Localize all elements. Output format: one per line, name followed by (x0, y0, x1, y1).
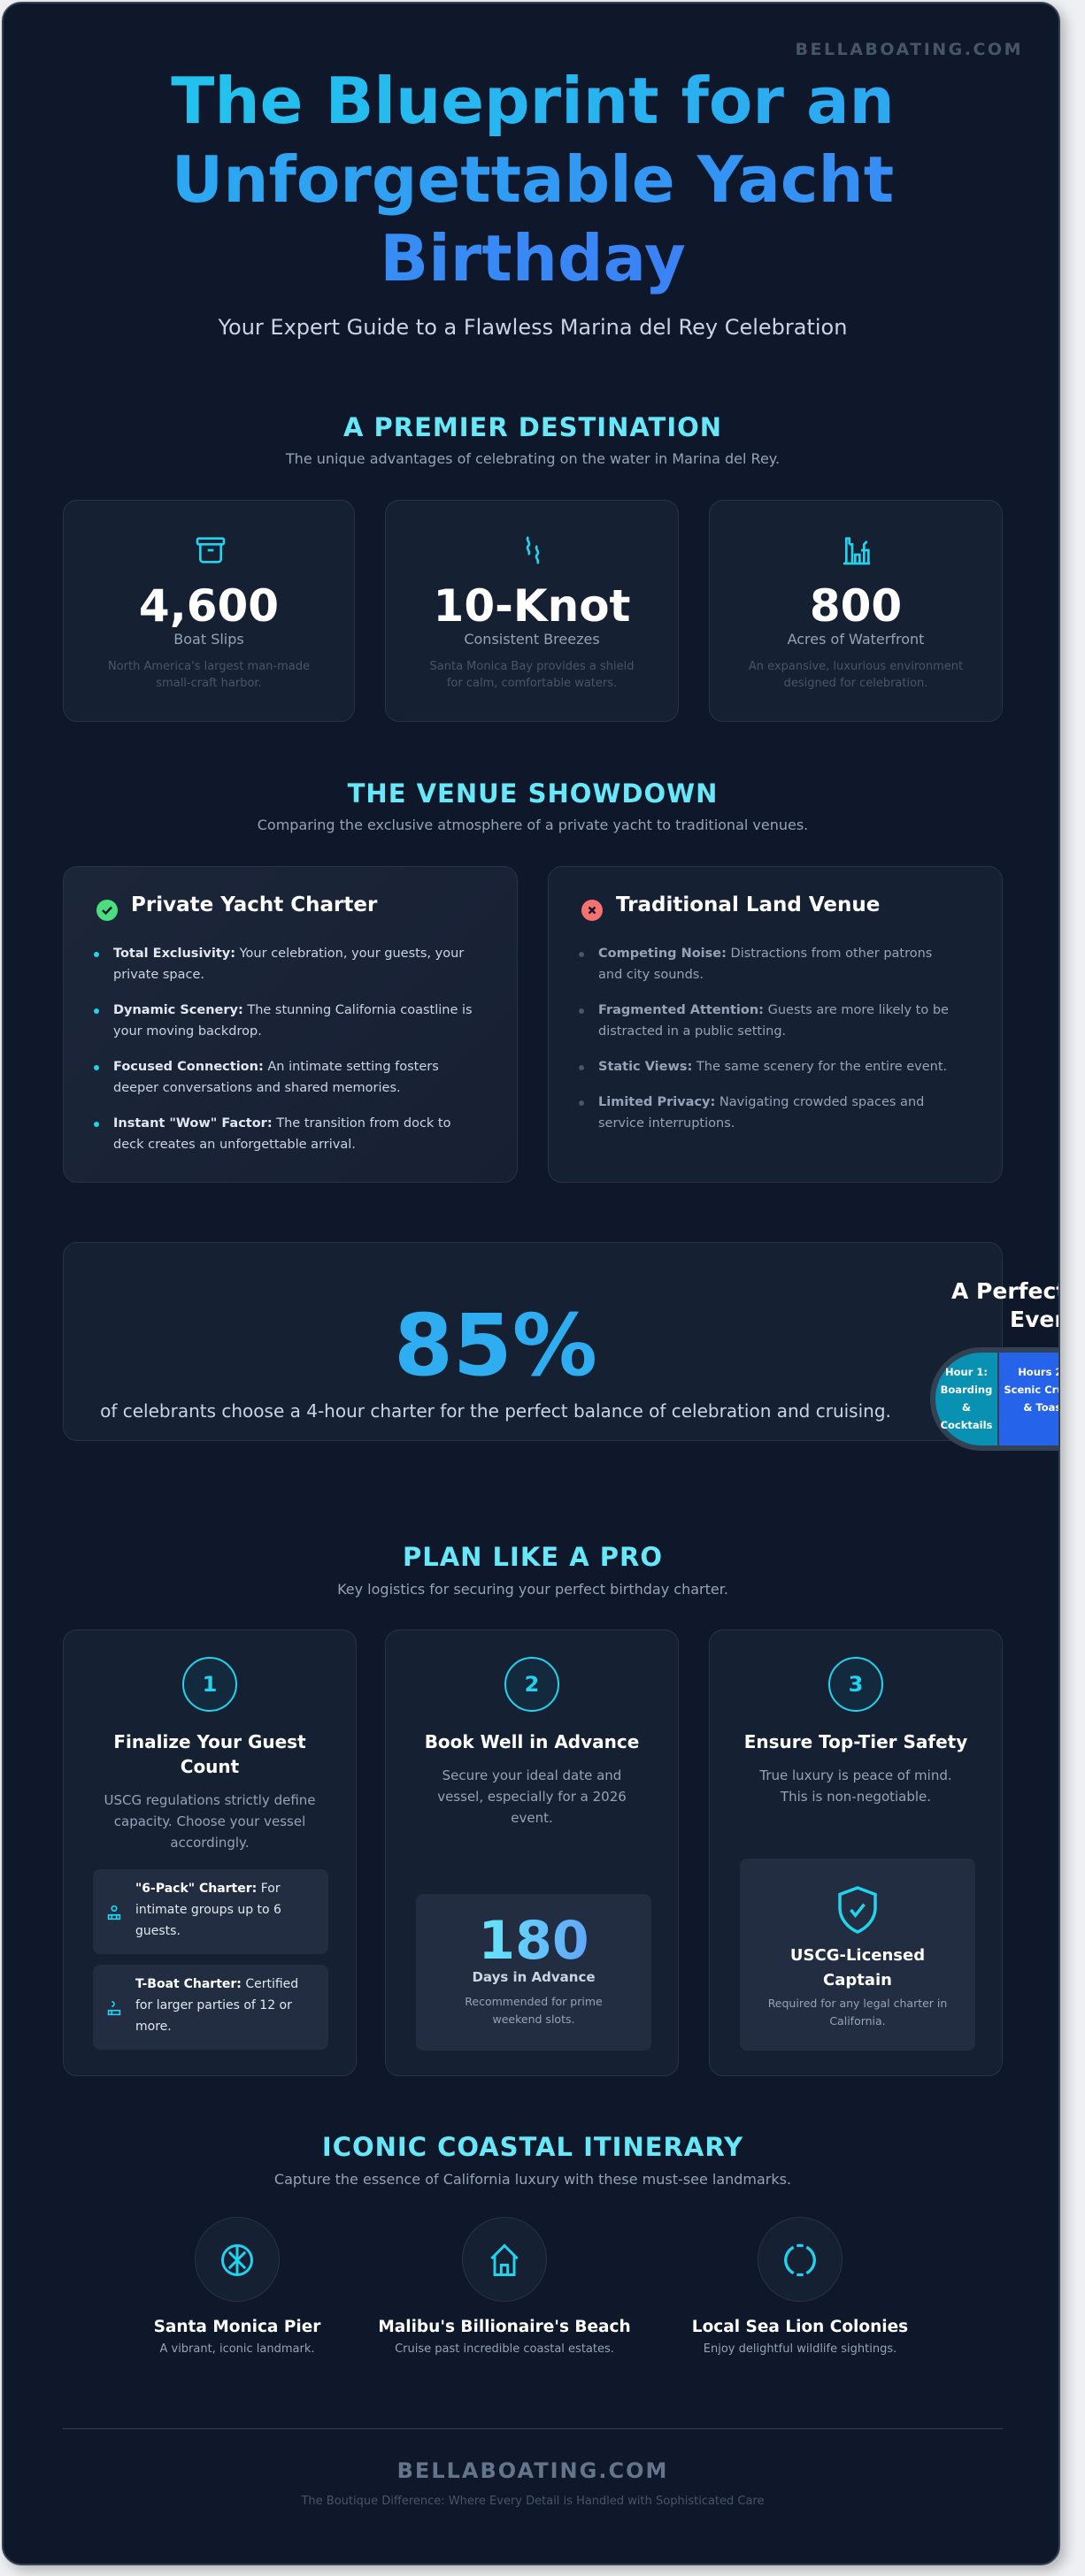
icon: shield (838, 1886, 877, 1934)
panel: private yacht: Dynamic Scenery: The stunning California coastline is your moving backdrop. (113, 1003, 473, 1039)
landmark: malibu: Malibu's Billionaire's Beach (378, 2318, 631, 2336)
brand top: BELLABOATING.COM (796, 40, 1023, 59)
caption: of celebrants choose a 4-hour charter for the perfect balance of celebration and cruising. (100, 1400, 891, 1422)
stat card: boat slips (63, 500, 355, 722)
segment hour 1: Hour 1: Boarding & Cocktails (941, 1366, 992, 1431)
timeline pill (clipped) (930, 1347, 1085, 1451)
title (171, 64, 895, 295)
subtitle: Your Expert Guide to a Flawless Marina del Rey Celebration (219, 315, 847, 340)
safety box (740, 1859, 975, 2051)
step 1 card: 1 (203, 1672, 217, 1697)
landmark: sea lions (692, 2217, 908, 2356)
title: The Blueprint for an (171, 64, 895, 138)
step 2 card (385, 1629, 679, 2076)
stat card: boat slips: North America's largest man-made small-craft harbor. (108, 660, 310, 690)
landmark: malibu (378, 2217, 631, 2356)
landmark: santa monica pier: Santa Monica Pier (154, 2318, 320, 2336)
heading: plan like a pro: PLAN LIKE A PRO (403, 1542, 663, 1572)
stat card: boat slips: 4,600 (139, 580, 279, 632)
panel: private yacht (63, 866, 518, 1183)
panel: private yacht: Total Exclusivity: Your celebration, your guests, your private space. (113, 947, 464, 982)
heading: premier destination: A PREMIER DESTINATION (343, 412, 722, 442)
panel: private yacht: Instant "Wow" Factor: The transition from dock to deck creates an unforgettable arrival. (113, 1116, 450, 1152)
panel: private yacht: Focused Connection: An intimate setting fosters deeper conversations and shared memories. (113, 1060, 439, 1095)
big number: 85% (394, 1296, 597, 1395)
step 1 card (63, 1629, 357, 2076)
stat box: 180 days: 180 (478, 1910, 589, 1972)
stat card: breezes: Santa Monica Bay provides a shield for calm, comfortable waters. (430, 660, 634, 690)
icon: box (196, 537, 225, 564)
safety box: Required for any legal charter in California. (768, 1997, 947, 2028)
timeline heading (clipped) (951, 1278, 1060, 1332)
stat box: 180 days: Days in Advance (472, 1969, 596, 1985)
icon: x (581, 900, 603, 921)
panel: land venue: Static Views: The same scenery for the entire event. (598, 1060, 947, 1074)
icon: waterfront (843, 537, 870, 564)
landmark: santa monica pier (154, 2217, 320, 2356)
stat card: breezes: Consistent Breezes (464, 631, 600, 648)
step 2 card: Secure your ideal date and vessel, especially for a 2026 event. (437, 1767, 627, 1826)
safety box: USCG-Licensed Captain (790, 1946, 925, 1990)
icon: check (96, 900, 118, 921)
stat card: acres: 800 (810, 580, 902, 632)
stat box: 180 days: Recommended for prime weekend slots. (465, 1995, 603, 2026)
stat card: acres: An expansive, luxurious environment designed for celebration. (749, 660, 963, 690)
step 2 card: Book Well in Advance (425, 1731, 639, 1752)
stat card: breezes (385, 500, 679, 722)
title: Birthday (380, 221, 686, 295)
sub box: 6-pack (93, 1869, 328, 1954)
step 1 card: Finalize Your Guest Count (113, 1731, 306, 1777)
sub box: 6-pack: "6-Pack" Charter: For intimate groups up to 6 guests. (135, 1882, 281, 1938)
landmark: sea lions: Enjoy delightful wildlife sightings. (704, 2342, 896, 2356)
panel: land venue (548, 866, 1003, 1183)
title: Unforgettable Yacht (172, 142, 894, 217)
landmark: sea lions: Local Sea Lion Colonies (692, 2318, 908, 2336)
step 3 card (709, 1629, 1003, 2076)
panel: land venue: Fragmented Attention: Guests are more likely to be distracted in a public setting. (598, 1003, 949, 1039)
sub box: t-boat (93, 1965, 328, 2050)
step 1 card: USCG regulations strictly define capacity. Choose your vessel accordingly. (104, 1792, 316, 1851)
heading: venue showdown: THE VENUE SHOWDOWN (348, 778, 718, 809)
landmark: malibu: Cruise past incredible coastal estates. (395, 2342, 614, 2356)
subheading: Key logistics for securing your perfect birthday charter. (337, 1581, 728, 1598)
stat card: breezes: 10-Knot (434, 580, 630, 632)
heading: itinerary: ICONIC COASTAL ITINERARY (322, 2132, 743, 2162)
sub box: t-boat: T-Boat Charter: Certified for larger parties of 12 or more. (135, 1977, 298, 2034)
footer brand: BELLABOATING.COM (397, 2458, 668, 2483)
subheading: Comparing the exclusive atmosphere of a private yacht to traditional venues. (258, 816, 808, 833)
stat box: 180 days (416, 1894, 651, 2051)
panel: land venue: Traditional Land Venue (616, 893, 880, 916)
panel: land venue: Limited Privacy: Navigating crowded spaces and service interruptions. (598, 1095, 924, 1131)
stat card: boat slips: Boat Slips (173, 631, 244, 648)
step 3 card: True luxury is peace of mind. This is non-negotiable. (759, 1767, 952, 1805)
landmark: santa monica pier: A vibrant, iconic landmark. (159, 2342, 315, 2356)
footer tagline: The Boutique Difference: Where Every Detail is Handled with Sophisticated Care (301, 2495, 765, 2508)
segment hours 2-3 (999, 1353, 1085, 1445)
stat card: acres (709, 500, 1003, 722)
icon: wind (526, 536, 540, 564)
step 3 card: Ensure Top-Tier Safety (744, 1731, 967, 1752)
step 3 card: 3 (849, 1672, 863, 1697)
subheading: Capture the essence of California luxury with these must-see landmarks. (274, 2171, 791, 2188)
panel: private yacht: Private Yacht Charter (131, 893, 377, 916)
segment hour 1 (935, 1353, 997, 1445)
step 2 card: 2 (525, 1672, 539, 1697)
subheading: The unique advantages of celebrating on the water in Marina del Rey. (286, 450, 780, 467)
stat card: acres: Acres of Waterfront (788, 631, 924, 648)
panel: land venue: Competing Noise: Distractions from other patrons and city sounds. (598, 947, 932, 982)
panel: 85% stat (63, 1242, 1003, 1441)
